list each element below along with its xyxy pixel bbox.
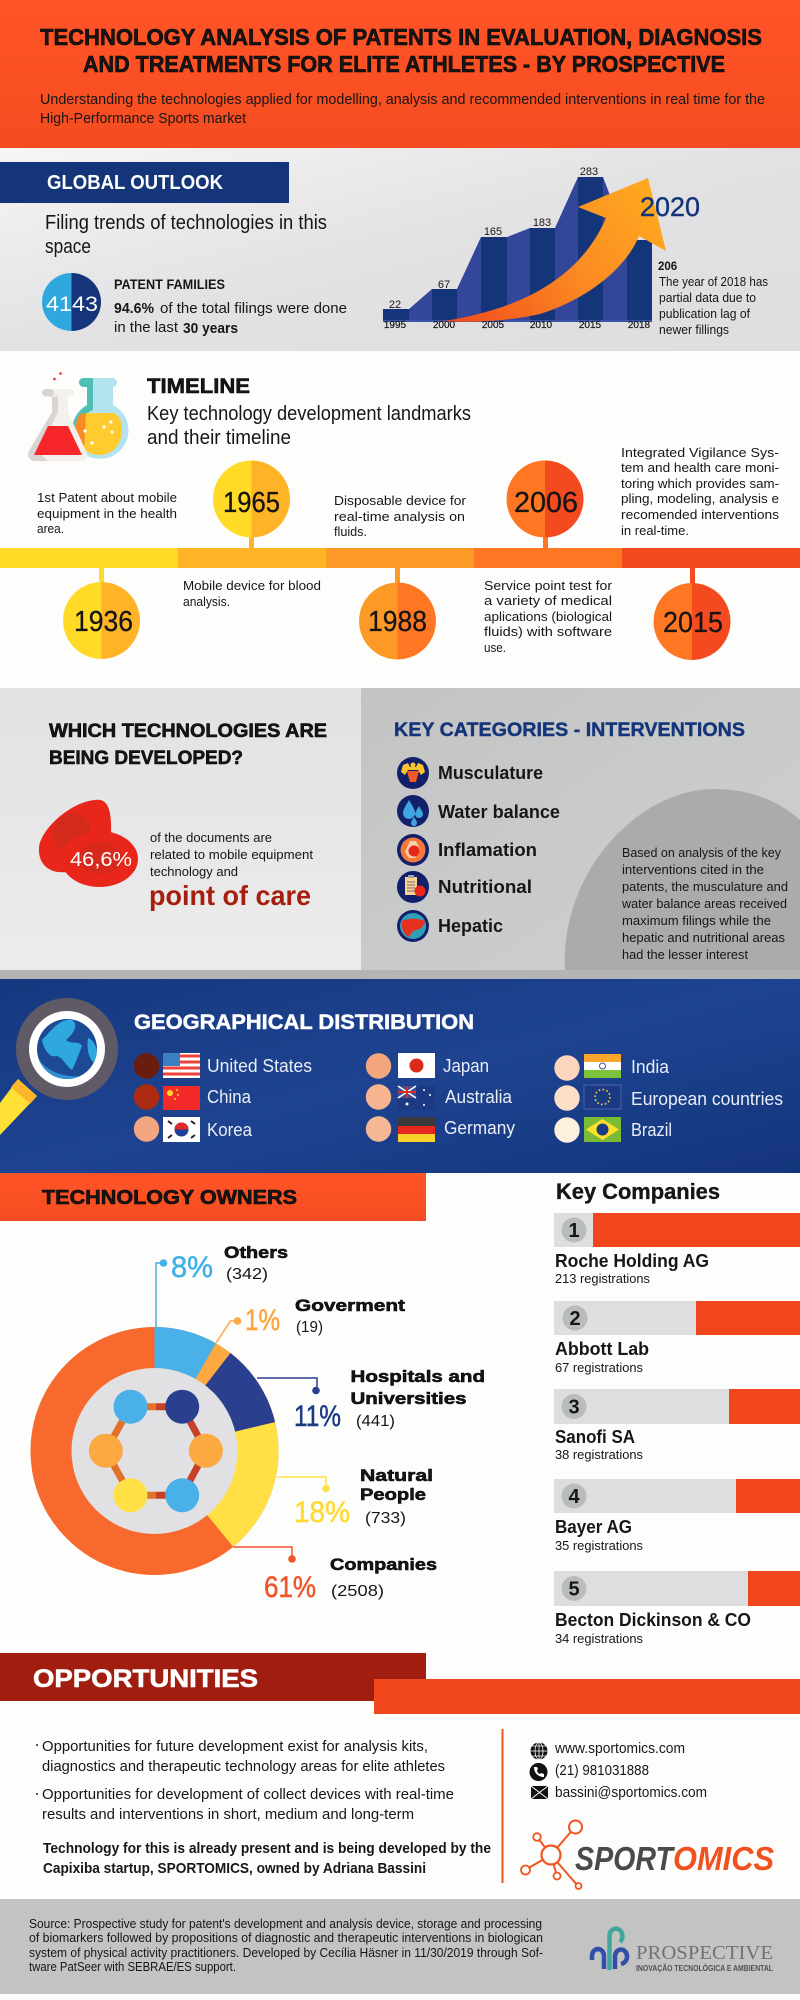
company: Sanofi SA: Sanofi SA (555, 1427, 635, 1447)
company: Bayer AG: 4 (568, 1486, 580, 1508)
callout: point of care: point of care (149, 880, 311, 911)
panel: footer (0, 1899, 800, 1994)
chart: filing trend bars: 2005 (482, 320, 505, 331)
heading: opportunities: OPPORTUNITIES (33, 1665, 258, 1693)
logo: Sportomics: SPORT (575, 1840, 675, 1877)
company: Bayer AG: 35 registrations (555, 1538, 643, 1553)
text: source note (29, 1916, 543, 1974)
text: 1936 milestone (37, 490, 177, 536)
legend: Brazil (554, 1117, 672, 1143)
chart: filing trend bars (383, 166, 652, 331)
text: 2015 milestone: in real-time. (621, 523, 689, 538)
legend: China: China (207, 1087, 252, 1107)
note: 2018 partial data (658, 261, 768, 337)
text: patent families: in the last (114, 319, 179, 336)
legend: Germany: Germany (444, 1118, 515, 1138)
milestone: 1988 (359, 568, 436, 660)
company: Abbott Lab: Abbott Lab (555, 1339, 649, 1359)
heading: which technologies: BEING DEVELOPED? (49, 748, 243, 769)
company: Abbott Lab (554, 1301, 800, 1375)
company: Sanofi SA: 3 (568, 1396, 580, 1418)
company: Abbott Lab: 67 registrations (555, 1360, 643, 1375)
contact: website: www.sportomics.com (554, 1740, 685, 1757)
subtitle (40, 91, 765, 127)
contact: phone (530, 1762, 649, 1781)
category: inflamation (397, 834, 537, 866)
text: 2015 milestone: toring which provides sam- (621, 476, 779, 491)
text: 2006 milestone: a variety of medical (484, 593, 612, 608)
chart: filing trend bars: 1995 (384, 320, 407, 331)
chart: ownership donut (30, 1327, 279, 1575)
text: source note: Source: Prospective study for patent's development and analysis device, storage and processing (29, 1916, 542, 1931)
legend: China (134, 1084, 252, 1110)
callout: others (156, 1243, 288, 1327)
chart: filing trend bars: 2000 (433, 320, 456, 331)
text: analysis note: hepatic and nutritional areas (622, 930, 785, 945)
text: sportomics note (43, 1840, 491, 1877)
heading: timeline: and their timeline (147, 427, 291, 449)
legend: United States (134, 1053, 312, 1079)
callout: others: 8% (171, 1251, 213, 1284)
panel: global outlook (0, 148, 800, 351)
legend: India (554, 1054, 670, 1081)
category: nutritional: Nutritional (438, 877, 532, 897)
company: Becton Dickinson & CO: Becton Dickinson & CO (555, 1610, 751, 1630)
milestone: 1965 (213, 460, 290, 548)
legend: Korea: Korea (207, 1120, 253, 1140)
legend: Australia: Australia (445, 1087, 513, 1107)
callout: companies: 61% (264, 1571, 316, 1604)
text: mobile equipment share: related to mobile equipment (150, 847, 313, 862)
note: 2018 partial data: publication lag of (659, 306, 750, 321)
heading: technology owners (0, 1173, 426, 1221)
panel: technology owners (0, 1173, 485, 1604)
text: analysis note: had the lesser interest (622, 947, 748, 962)
heading: timeline: Key technology development landmarks (147, 403, 471, 425)
text: mobile equipment share: technology and (150, 864, 238, 879)
text: source note: system of physical activity practitioners. Developed by Cecília Häsner in 11/30/2019 through Sof- (29, 1945, 543, 1960)
text: filing trends (45, 212, 327, 258)
icon: patent families badge (42, 273, 101, 331)
logo: Sportomics (521, 1820, 774, 1889)
text: sportomics note: Capixiba startup, SPORTOMICS, owned by Adriana Bassini (43, 1860, 426, 1877)
chart: filing trend bars: 183 (533, 217, 551, 229)
text: 2015 milestone: Integrated Vigilance Sys- (621, 445, 779, 460)
title: TECHNOLOGY ANALYSIS OF PATENTS IN EVALUATION, DIAGNOSIS (40, 24, 762, 50)
legend: Germany (366, 1116, 515, 1142)
text: analysis note: interventions cited in the (622, 862, 764, 877)
heading: opportunities (0, 1653, 800, 1714)
note: 2018 partial data: partial data due to (659, 290, 756, 305)
company: Becton Dickinson & CO: 5 (568, 1578, 580, 1600)
category: water balance (397, 795, 560, 827)
category: musculature: Musculature (438, 763, 543, 783)
heading: technology owners: TECHNOLOGY OWNERS (42, 1187, 297, 1209)
text: 1965 milestone: analysis. (183, 594, 230, 609)
legend: United States: United States (207, 1056, 312, 1076)
chart: filing trend bars: 2015 (579, 320, 602, 331)
title (40, 24, 762, 77)
text: 2006 milestone (484, 578, 613, 655)
legend: Korea (134, 1116, 253, 1142)
text: mobile equipment share: of the documents are (150, 830, 272, 845)
text: filing trends: Filing trends of technologies in this (45, 212, 327, 234)
callout: companies: (2508) (331, 1583, 384, 1600)
title: AND TREATMENTS FOR ELITE ATHLETES - BY PROSPECTIVE (83, 51, 725, 77)
text: analysis note: maximum filings while the (622, 913, 771, 928)
chart: filing trend bars: 283 (580, 166, 598, 178)
callout: government: (19) (296, 1319, 323, 1336)
company: Bayer AG (554, 1479, 800, 1553)
logo: Prospective: PROSPECTIVE (636, 1942, 773, 1964)
icon: red blood cell with 46,6% (39, 800, 138, 887)
text: 2015 milestone: tem and health care moni- (621, 460, 779, 475)
legend: Japan: Japan (443, 1056, 489, 1076)
legend: Japan (366, 1053, 489, 1079)
panel: geographical distribution (0, 979, 800, 1173)
company: Roche Holding AG (554, 1213, 800, 1286)
company: Roche Holding AG: 1 (568, 1220, 580, 1242)
legend: Brazil: Brazil (631, 1120, 672, 1140)
subtitle: High-Performance Sports market (40, 110, 247, 127)
text: patent families: of the total filings were done (160, 300, 347, 317)
text: 2006 milestone: Service point test for (484, 578, 613, 593)
company: Roche Holding AG: Roche Holding AG (555, 1251, 709, 1271)
text: filing trends: space (45, 236, 91, 258)
text: 1988 milestone: fluids. (334, 524, 367, 539)
callout: hospitals and universities (257, 1367, 485, 1433)
callout: government: 1% (245, 1304, 280, 1337)
chart: filing trend bars: 165 (484, 226, 502, 238)
heading: key categories: KEY CATEGORIES - INTERVENTIONS (394, 720, 745, 741)
milestone: 1936 (63, 568, 140, 659)
heading: global outlook (0, 162, 289, 203)
company: Roche Holding AG: 213 registrations (555, 1271, 650, 1286)
category: hepatic (397, 910, 503, 942)
text: 1988 milestone: real-time analysis on (334, 509, 465, 524)
text: 2015 milestone: pling, modeling, analysis e (621, 491, 779, 506)
callout: companies: Companies (330, 1555, 437, 1574)
legend: India: India (631, 1057, 670, 1077)
milestone: 2015: 2015 (663, 607, 723, 639)
callout: government (216, 1296, 405, 1343)
text: 1936 milestone: 1st Patent about mobile (37, 490, 177, 505)
heading: which technologies: WHICH TECHNOLOGIES ARE (49, 721, 327, 742)
category: musculature (397, 757, 543, 789)
text: opportunity bullets (36, 1738, 454, 1823)
text: patent families (114, 276, 347, 337)
text: sportomics note: Technology for this is already present and is being developed by the (43, 1840, 491, 1857)
chart: filing trend bars: 67 (438, 279, 450, 291)
milestone: 2006: 2006 (514, 487, 578, 519)
arrow: upward trend (444, 178, 666, 322)
callout: companies (233, 1547, 437, 1604)
icon: lab flasks (28, 372, 129, 461)
text: 2006 milestone: fluids) with software (484, 624, 612, 639)
callout: hospitals and universities: Universities (350, 1389, 466, 1408)
company: Becton Dickinson & CO (554, 1571, 800, 1646)
label: 2020: 2020 (640, 192, 700, 222)
text: source note: tware PatSeer with SEBRAE/ES support. (29, 1959, 236, 1974)
callout: hospitals and universities: (441) (356, 1413, 395, 1430)
heading: timeline (147, 375, 471, 449)
panel: header (0, 0, 800, 148)
text: mobile equipment share (150, 830, 313, 879)
heading: key companies: Key Companies (556, 1179, 720, 1204)
icon: molecule ring (89, 1390, 223, 1512)
text: 1988 milestone: Disposable device for (334, 493, 467, 508)
chart: filing trend bars: 22 (389, 299, 401, 311)
panel: key companies (554, 1179, 800, 1646)
category: water balance: Water balance (438, 802, 560, 822)
contact: phone: (21) 981031888 (555, 1762, 649, 1779)
callout: hospitals and universities: Hospitals and (350, 1367, 485, 1386)
panel: timeline (0, 372, 800, 660)
callout: natural people: (733) (365, 1510, 406, 1527)
text: 2015 milestone (621, 445, 780, 538)
text: analysis note: patents, the musculature and (622, 879, 788, 894)
heading: global outlook: GLOBAL OUTLOOK (47, 172, 224, 194)
chart: filing trend bars: 2010 (530, 320, 553, 331)
category: hepatic: Hepatic (438, 916, 503, 936)
company: Becton Dickinson & CO: 34 registrations (555, 1631, 643, 1646)
text: analysis note: water balance areas received (621, 896, 787, 911)
panel: key categories (361, 688, 800, 970)
category: inflamation: Inflamation (438, 840, 537, 860)
note: 2018 partial data: 206 (658, 261, 677, 273)
chart: filing trend bars: 2018 (628, 320, 651, 331)
text: 1936 milestone: equipment in the health (37, 506, 177, 521)
text: 1965 milestone (183, 578, 321, 609)
text: source note: of biomarkers followed by propositions of diagnostic and therapeutic interventions in biologican (29, 1930, 543, 1945)
text: opportunity bullets: results and interventions in short, medium and long-term (42, 1806, 414, 1823)
company: Abbott Lab: 2 (569, 1308, 581, 1330)
text: 2006 milestone: use. (484, 640, 506, 655)
company: Sanofi SA (554, 1389, 800, 1462)
icon: magnifier with globe (0, 998, 118, 1135)
callout: others: Others (224, 1243, 288, 1262)
text: 2015 milestone: recomended interventions (621, 507, 780, 522)
text: patent families: 94.6% (114, 300, 154, 317)
category: nutritional (397, 871, 532, 903)
heading: timeline: TIMELINE (147, 375, 250, 398)
icon: patent families badge: 4143 (46, 293, 98, 316)
legend: Australia (366, 1084, 513, 1110)
note: 2018 partial data: newer fillings (659, 322, 729, 337)
callout: natural people: Natural (360, 1466, 433, 1485)
note: 2018 partial data: The year of 2018 has (659, 274, 768, 289)
subtitle: Understanding the technologies applied for modelling, analysis and recommended interventions in real time for the (40, 91, 765, 108)
milestone: 1965: 1965 (223, 487, 280, 519)
callout: natural people (277, 1466, 433, 1529)
contact: website (530, 1740, 685, 1760)
logo: Prospective (592, 1929, 773, 1973)
contact: email: bassini@sportomics.com (555, 1784, 707, 1801)
milestone: 1936: 1936 (74, 606, 133, 638)
callout: natural people: 18% (294, 1496, 350, 1529)
text: patent families: 30 years (183, 320, 238, 337)
legend: European countries (554, 1085, 783, 1111)
callout: government: Goverment (295, 1296, 405, 1315)
text: analysis note (621, 845, 788, 962)
icon: red blood cell with 46,6%: 46,6% (70, 849, 132, 871)
timeline bar (0, 548, 800, 568)
text: patent families: PATENT FAMILIES (114, 276, 225, 292)
text: 1936 milestone: area. (37, 521, 64, 536)
text: opportunity bullets: diagnostics and therapeutic technology areas for elite athletes (42, 1758, 445, 1775)
text: 1988 milestone (334, 493, 467, 539)
company: Sanofi SA: 38 registrations (555, 1447, 643, 1462)
callout: hospitals and universities: 11% (294, 1400, 341, 1433)
logo: Sportomics: OMICS (673, 1840, 774, 1877)
text: opportunity bullets: Opportunities for development of collect devices with real-time (42, 1786, 454, 1803)
heading: which technologies (49, 721, 327, 769)
milestone: 2015 (654, 568, 730, 660)
text: opportunity bullets: Opportunities for future development exist for analysis kits, (42, 1738, 428, 1755)
text: 1965 milestone: Mobile device for blood (183, 578, 321, 593)
panel: which technologies (0, 688, 361, 970)
legend: European countries: European countries (631, 1089, 783, 1109)
company: Bayer AG: Bayer AG (555, 1517, 632, 1537)
text: analysis note: Based on analysis of the key (622, 845, 781, 860)
callout: others: (342) (226, 1266, 268, 1283)
panel: opportunities (0, 1653, 800, 1889)
callout: natural people: People (360, 1485, 426, 1504)
text: 2006 milestone: aplications (biological (484, 609, 612, 624)
milestone: 1988: 1988 (368, 606, 427, 638)
heading: geographical distribution: GEOGRAPHICAL DISTRIBUTION (134, 1011, 474, 1034)
milestone: 2006 (506, 460, 584, 548)
